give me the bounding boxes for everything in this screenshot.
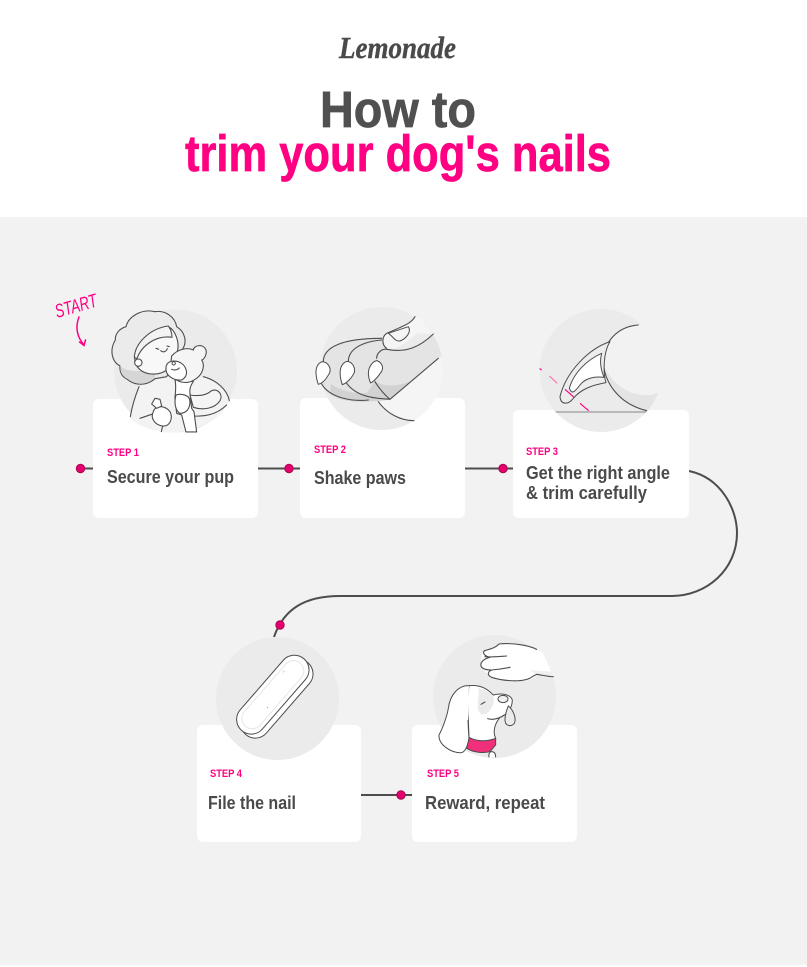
icon: paw and claws — [316, 316, 441, 430]
hands — [175, 394, 190, 413]
icon: person hugging dog — [112, 310, 237, 433]
step 2 card — [300, 398, 465, 518]
panel: steps background — [0, 217, 807, 965]
headband — [134, 326, 172, 359]
body — [130, 376, 229, 433]
bear — [166, 346, 221, 432]
paw outer fill beyond the circle — [322, 380, 331, 394]
collar — [467, 737, 496, 752]
icon: nail with trim angle — [540, 324, 658, 432]
paw fills — [324, 323, 443, 420]
step 5 card: STEP 5 — [427, 768, 459, 780]
path markers — [76, 464, 507, 799]
dog nose — [498, 695, 508, 703]
claws — [316, 361, 383, 385]
toe shade — [605, 368, 658, 410]
bear head — [170, 346, 206, 382]
step 3 card: STEP 3 — [526, 446, 558, 458]
step 2 card: Shake paws — [314, 467, 406, 488]
bear snout — [166, 361, 186, 380]
title: How to — [320, 81, 476, 138]
step 1 card: Secure your pup — [107, 466, 234, 487]
arrow: start — [77, 317, 86, 346]
dog tongue — [505, 706, 515, 726]
dog ear — [439, 686, 469, 753]
step 1 card: STEP 1 — [107, 447, 139, 459]
step 3 card: Get the right angle — [526, 462, 670, 483]
trim guide — [539, 368, 589, 411]
step 1 card — [93, 399, 258, 518]
path connector — [80, 468, 737, 795]
step 4 card: STEP 4 — [210, 768, 243, 780]
hand — [481, 644, 553, 681]
start label — [53, 290, 101, 346]
step 4 card: File the nail — [208, 792, 296, 813]
dog patch — [478, 688, 494, 714]
icon: dog and petting hand — [433, 635, 556, 758]
step 5 card — [412, 725, 577, 842]
dog head — [468, 685, 512, 741]
ground line — [555, 411, 646, 413]
ear — [135, 359, 142, 366]
title — [185, 81, 611, 182]
toe highlight — [603, 323, 667, 411]
logo: Lemonade — [338, 30, 456, 65]
hair shading — [120, 366, 155, 383]
nail — [560, 342, 610, 403]
thumb — [383, 317, 423, 349]
hair — [112, 311, 185, 384]
step 4 card — [197, 725, 361, 842]
step 2 card: STEP 2 — [314, 444, 346, 456]
face — [135, 327, 178, 374]
start label: START — [53, 290, 101, 323]
dog eye — [481, 702, 504, 719]
icon: nail file — [216, 637, 339, 760]
bear paw — [190, 390, 221, 409]
bear body — [175, 380, 197, 432]
step 5 card: Reward, repeat — [425, 792, 545, 813]
title: trim your dog's nails — [185, 125, 611, 182]
tag — [489, 752, 496, 757]
step 3 card — [513, 410, 689, 518]
step 3 card: & trim carefully — [526, 482, 648, 503]
